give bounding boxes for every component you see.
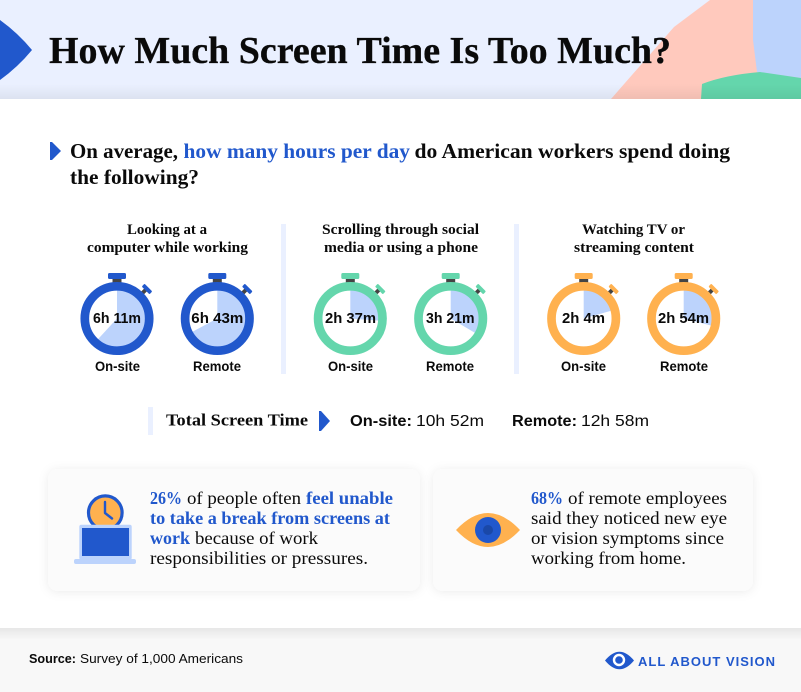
on-site total: On-site: (350, 413, 412, 430)
icon: laptop and clock (74, 496, 136, 564)
icon: eye (456, 513, 520, 547)
source: Source: (29, 651, 76, 666)
stopwatch: tv on-site 2h 4m (552, 273, 619, 351)
panel: eye callout (433, 469, 753, 591)
question heading: the following? (70, 165, 199, 189)
on-site total: 10h 52m (416, 413, 484, 430)
logo: all about vision (605, 652, 775, 669)
callout text: 68%: or vision symptoms since (531, 528, 724, 548)
panel: phone (318, 222, 486, 374)
title: How Much Screen Time Is Too Much? (49, 30, 671, 72)
callout text: 26%: of people often (187, 488, 301, 508)
question heading (50, 139, 730, 189)
stopwatch: phone remote 3h 21m (418, 273, 486, 351)
decorative blue shape (753, 0, 801, 78)
column heading: phone (322, 222, 479, 256)
stopwatch: tv remote 2h 54m (652, 273, 719, 351)
callout text: 26%: feel unable (306, 488, 393, 508)
callout text: 26%: because of work (195, 528, 318, 548)
label: on-site: On-site (328, 359, 373, 374)
column heading: computer: Looking at a (127, 222, 208, 238)
footer (0, 628, 801, 692)
column heading: tv (574, 222, 694, 256)
panel: break callout (48, 469, 420, 591)
stopwatch: phone remote 3h 21m: 3h 21m (426, 310, 475, 327)
decorative peach shape (611, 0, 801, 99)
column heading: phone: media or using a phone (324, 240, 479, 256)
label: on-site: On-site (95, 359, 140, 374)
column heading: computer: computer while working (87, 240, 249, 256)
label: on-site: On-site (561, 359, 606, 374)
decorative green shape (701, 72, 801, 99)
callout text: 68%: 68% (531, 488, 563, 508)
panel: computer (85, 222, 253, 374)
callout text: 68%: working from home. (531, 548, 686, 568)
remote total: 12h 58m (581, 413, 649, 430)
question heading: do American workers spend doing (414, 139, 730, 163)
column heading: tv: Watching TV or (582, 222, 686, 238)
column heading: tv: streaming content (574, 240, 694, 256)
callout text: 26%: to take a break from screens at (150, 508, 390, 528)
stopwatch: phone on-site 2h 37m: 2h 37m (325, 310, 376, 327)
panel: tv (552, 222, 719, 374)
stopwatch: tv on-site 2h 4m: 2h 4m (562, 310, 605, 327)
callout text: 26%: responsibilities or pressures. (150, 548, 368, 568)
stopwatch: computer on-site 6h 11m: 6h 11m (93, 310, 141, 327)
callout text: 26%: 26% (150, 488, 182, 508)
callout text: 68%: said they noticed new eye (531, 508, 727, 528)
total arrow (319, 411, 330, 431)
callout text: 68%: of remote employees (568, 488, 727, 508)
callout text: 26%: work (150, 528, 190, 548)
source: Survey of 1,000 Americans (80, 651, 244, 666)
label: remote: Remote (426, 359, 474, 374)
column heading: phone: Scrolling through social (322, 222, 479, 238)
remote total (512, 413, 649, 430)
question heading: On average, (70, 139, 178, 163)
stopwatch: computer on-site 6h 11m (85, 273, 152, 351)
total screen time row (148, 407, 649, 435)
header arrow (0, 20, 32, 80)
stopwatch: tv remote 2h 54m: 2h 54m (658, 310, 709, 327)
question arrow (50, 142, 61, 160)
on-site total (350, 413, 484, 430)
label: remote: Remote (660, 359, 708, 374)
logo: all about vision: ALL ABOUT VISION (638, 654, 775, 669)
header banner (0, 0, 801, 99)
callout text: 26% (150, 488, 393, 568)
stopwatch: phone on-site 2h 37m (318, 273, 386, 351)
question heading: how many hours per day (184, 139, 410, 163)
column heading: computer (87, 222, 249, 256)
label: remote: Remote (193, 359, 241, 374)
stopwatch: computer remote 6h 43m: 6h 43m (191, 310, 243, 327)
total label: Total Screen Time (166, 410, 308, 430)
callout text: 68% (531, 488, 727, 568)
remote total: Remote: (512, 413, 577, 430)
stopwatch: computer remote 6h 43m (185, 273, 253, 351)
